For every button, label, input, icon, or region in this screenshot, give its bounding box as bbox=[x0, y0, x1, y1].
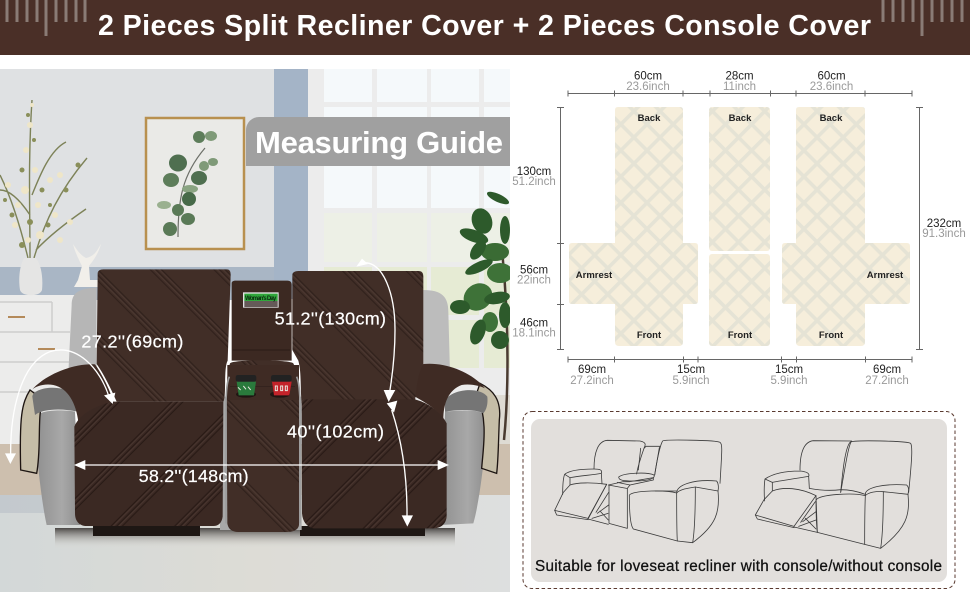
measurement labels on photo bbox=[81, 309, 386, 486]
piece labels: Back bbox=[729, 113, 752, 124]
piece labels bbox=[576, 113, 904, 341]
magazine in console pocket bbox=[243, 292, 279, 308]
top dimension line: 23.6inch bbox=[626, 81, 670, 93]
bottom dimension line: 5.9inch bbox=[770, 375, 808, 387]
recliner sofa with brown covers bbox=[5, 259, 500, 532]
top dimension line: 23.6inch bbox=[810, 81, 853, 93]
piece labels: Armrest bbox=[867, 270, 904, 281]
line art: recliner with console bbox=[555, 440, 722, 543]
piece labels: Front bbox=[637, 330, 662, 341]
header banner bbox=[0, 0, 970, 55]
right dimension line: 232cm bbox=[927, 218, 961, 230]
bottom dimension line: 5.9inch bbox=[672, 375, 710, 387]
measurement labels on photo: 58.2''(148cm) bbox=[139, 466, 249, 486]
line art: recliner without console bbox=[755, 441, 912, 548]
arrow: 58.2 inch width bbox=[74, 460, 449, 470]
left dimension line: 130cm bbox=[517, 166, 551, 178]
top dimension line bbox=[568, 70, 912, 96]
piece labels: Front bbox=[819, 330, 844, 341]
left dimension line: 22inch bbox=[517, 274, 551, 286]
right arm flap bbox=[415, 364, 500, 473]
left back cover bbox=[97, 269, 231, 402]
grey sofa body bbox=[35, 288, 486, 530]
middle front piece bbox=[709, 254, 770, 346]
panel: sofa photo with measurements bbox=[0, 69, 513, 592]
flower branches in vase bbox=[0, 100, 101, 295]
measurement labels on photo: 40''(102cm) bbox=[287, 422, 384, 442]
left dimension line: 46cm bbox=[520, 318, 548, 330]
measuring guide label: Measuring Guide bbox=[255, 125, 503, 160]
bottom dimension line: 69cm bbox=[873, 364, 901, 376]
panel: compatibility note bbox=[523, 412, 955, 588]
measurement labels on photo: 51.2''(130cm) bbox=[275, 309, 386, 329]
piece labels: Back bbox=[638, 113, 661, 124]
arrow: 40 inch seat arc bbox=[387, 401, 413, 527]
left dimension line bbox=[512, 108, 564, 350]
console cover bbox=[226, 281, 300, 532]
fiddle leaf plant bbox=[450, 189, 513, 440]
piece labels: Armrest bbox=[576, 270, 613, 281]
bottom dimension line: 27.2inch bbox=[570, 375, 614, 387]
arrow: 51.2 inch back arc bbox=[356, 259, 395, 402]
bottom dimension line: 15cm bbox=[677, 364, 705, 376]
piece labels: Back bbox=[820, 113, 843, 124]
cups in cup holders bbox=[236, 375, 292, 398]
compatibility caption: Suitable for loveseat recliner with console/without console bbox=[535, 558, 942, 575]
left dimension line: 18.1inch bbox=[512, 328, 556, 340]
top dimension line: 11inch bbox=[723, 81, 756, 93]
left dimension line: 56cm bbox=[520, 264, 548, 276]
top dimension line: 28cm bbox=[725, 70, 754, 82]
room background bbox=[0, 69, 510, 592]
left cover piece bbox=[569, 107, 698, 346]
top dimension line: 60cm bbox=[817, 70, 846, 82]
top dimension line: 60cm bbox=[634, 70, 662, 82]
middle back piece bbox=[709, 107, 770, 251]
right cover piece bbox=[782, 107, 910, 346]
wall picture with eucalyptus bbox=[146, 118, 244, 249]
measurement labels on photo: 27.2''(69cm) bbox=[81, 331, 183, 351]
left arm flap bbox=[20, 364, 114, 473]
bottom dimension line: 15cm bbox=[775, 364, 803, 376]
measuring guide label bbox=[246, 117, 510, 166]
right dimension line: 91.3inch bbox=[922, 228, 966, 240]
left dimension line: 51.2inch bbox=[512, 176, 556, 188]
piece labels: Front bbox=[728, 330, 753, 341]
title: 2 Pieces Split Recliner Cover + 2 Pieces Console Cover bbox=[98, 10, 871, 42]
bottom dimension line: 69cm bbox=[578, 364, 606, 376]
bottom dimension line bbox=[568, 356, 912, 387]
right dimension line bbox=[916, 108, 966, 350]
arrow: 27.2 inch armrest arc bbox=[5, 350, 115, 464]
right seat cover bbox=[302, 399, 447, 528]
magazine in console pocket: Woman's Day bbox=[245, 296, 277, 302]
left seat cover bbox=[74, 402, 223, 526]
right back cover bbox=[292, 271, 423, 403]
panel: cover dimension diagram bbox=[512, 70, 966, 387]
bottom dimension line: 27.2inch bbox=[865, 375, 909, 387]
